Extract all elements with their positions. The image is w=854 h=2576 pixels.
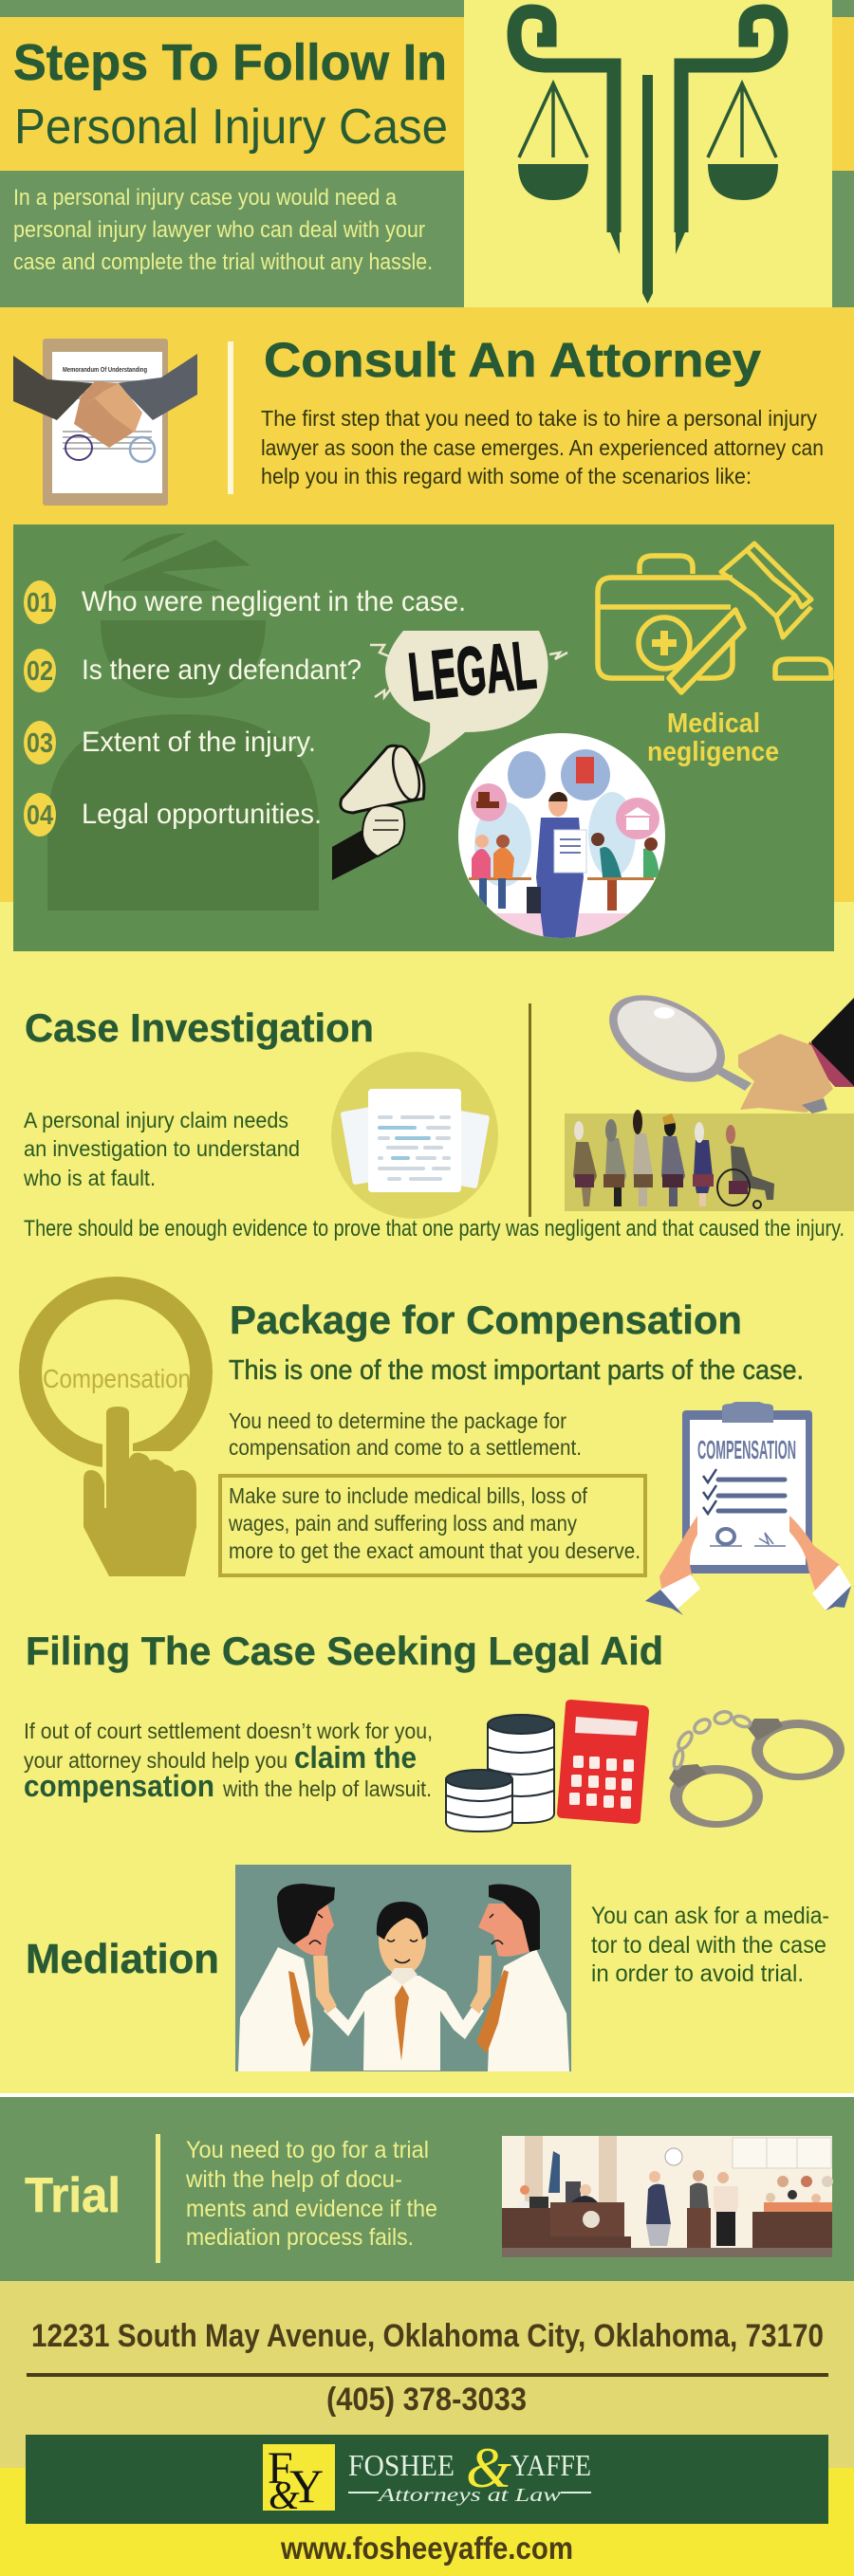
logo: foshee and yaffe — [26, 2435, 828, 2524]
logo: foshee and yaffe: YAFFE — [511, 2448, 591, 2482]
item 03: Extent of the injury. — [82, 727, 316, 758]
icon: calculator — [557, 1700, 649, 1824]
text: claim description: who is at fault. — [23, 1166, 156, 1190]
figure 6 wheelchair — [717, 1125, 774, 1208]
text: trial description: mediation process fails. — [186, 2224, 414, 2251]
panel: header — [0, 0, 854, 307]
item 02 — [24, 649, 362, 692]
logo: foshee and yaffe: FOSHEE — [348, 2448, 455, 2482]
icon: magnifying glass in hand — [595, 977, 854, 1113]
panel: mediation — [26, 1865, 829, 2071]
panel: filing the case — [24, 1628, 845, 1831]
list: scenario items — [24, 580, 466, 837]
text: filing description: with the help of lawsuit. — [222, 1776, 432, 1801]
logo: foshee and yaffe: F — [268, 2443, 293, 2493]
callout box — [220, 1476, 645, 1575]
text: phone: (405) 378-3033 — [326, 2382, 527, 2418]
right man — [476, 1884, 569, 2071]
heading: package for compensation: Package for Compensation — [230, 1297, 742, 1342]
item 01 — [24, 580, 466, 624]
text: filing description: claim the — [294, 1740, 417, 1775]
label: medical negligence: negligence — [647, 737, 779, 767]
title: Personal Injury Case — [14, 100, 448, 155]
panel: case investigation — [23, 977, 854, 1242]
text: filing description: your attorney should help you — [24, 1748, 288, 1773]
illustration: three businessmen — [235, 1865, 571, 2071]
icon: compensation button with pointing hand — [30, 1288, 201, 1579]
text: mediation description — [591, 1903, 829, 1987]
heading: case investigation: Case Investigation — [25, 1005, 374, 1050]
logo: foshee and yaffe: Attorneys at Law — [376, 2485, 562, 2506]
icon: scales of justice — [514, 11, 781, 304]
icon: handshake over document: Memorandum Of Understanding — [63, 367, 147, 374]
text: trial description: with the help of docu- — [185, 2166, 402, 2193]
logo: foshee and yaffe: & — [466, 2437, 511, 2499]
icon: medical kit and gavel — [598, 543, 831, 692]
callout box: Make sure to include medical bills, loss of — [229, 1483, 588, 1508]
figure 5 — [693, 1122, 714, 1206]
intro text: In a personal injury case you would need a — [13, 185, 398, 211]
text: claim description — [23, 1108, 300, 1190]
item 01: Who were negligent in the case. — [82, 586, 466, 617]
text: trial description — [185, 2137, 437, 2251]
item 03: 03 — [27, 728, 53, 759]
left man — [238, 1884, 335, 2071]
center man — [313, 1902, 492, 2070]
panel: contact footer — [0, 2281, 854, 2576]
item 02: 02 — [27, 656, 53, 687]
item 02: Is there any defendant? — [82, 654, 362, 686]
intro text: personal injury lawyer who can deal with your — [13, 217, 425, 243]
callout box: more to get the exact amount that you deserve. — [229, 1538, 640, 1563]
illustration: queue of people with briefcases — [565, 1110, 854, 1211]
item 04: Legal opportunities. — [82, 799, 322, 830]
logo: foshee and yaffe: & — [269, 2475, 300, 2518]
panel: package for compensation — [30, 1288, 851, 1615]
text: mediation description: You can ask for a media- — [591, 1903, 829, 1929]
icon: handcuffs — [669, 1710, 845, 1828]
heading: filing the case: Filing The Case Seeking Legal Aid — [26, 1628, 663, 1673]
text: package description: compensation and come to a settlement. — [229, 1435, 582, 1460]
logo: foshee and yaffe: Y — [289, 2459, 324, 2512]
panel: trial — [0, 2093, 854, 2281]
text: consult description — [261, 406, 824, 488]
icon: coin stacks — [446, 1715, 554, 1831]
icon: legal speech bubble: LEGAL — [405, 627, 540, 716]
heading: consult an attorney: Consult An Attorney — [264, 333, 762, 387]
label: medical negligence — [647, 708, 779, 767]
figure 4 — [661, 1113, 685, 1206]
heading: trial: Trial — [25, 2168, 121, 2223]
text: claim description: an investigation to understand — [24, 1136, 300, 1161]
icon: compensation button with pointing hand: Compensation — [43, 1364, 191, 1393]
text: package description: You need to determine the package for — [229, 1408, 566, 1433]
panel: consult an attorney — [0, 307, 854, 902]
figure 3 — [633, 1110, 653, 1206]
title: Steps To Follow In — [13, 34, 447, 91]
item 03 — [24, 721, 316, 764]
figure 1 — [573, 1121, 597, 1206]
figure 2 — [603, 1119, 626, 1206]
title — [13, 34, 448, 155]
item 04 — [24, 793, 322, 837]
text: mediation description: tor to deal with the case — [591, 1932, 826, 1959]
intro text — [13, 185, 433, 275]
label: medical negligence: Medical — [667, 708, 760, 739]
item 01: 01 — [27, 588, 53, 618]
callout box: wages, pain and suffering loss and many — [228, 1511, 577, 1536]
text: consult description: The first step that you need to take is to hire a personal injury — [261, 406, 817, 431]
text: trial description: ments and evidence if the — [186, 2196, 437, 2222]
text: package description — [229, 1408, 582, 1460]
icon: documents in circle — [331, 1052, 498, 1219]
intro text: case and complete the trial without any hassle. — [13, 249, 433, 275]
text: filing description: If out of court settlement doesn’t work for you, — [24, 1719, 433, 1743]
icon: megaphone with hand — [332, 744, 424, 880]
icon: compensation clipboard — [645, 1402, 851, 1615]
illustration: legal team circle — [458, 733, 666, 942]
panel: scenarios — [13, 524, 834, 951]
illustration: courtroom — [502, 2136, 833, 2257]
text: mediation description: in order to avoid trial. — [591, 1960, 804, 1987]
text: filing description: compensation — [24, 1769, 214, 1803]
text: consult description: help you in this regard with some of the scenarios like: — [261, 464, 752, 488]
text: trial description: You need to go for a trial — [186, 2137, 429, 2163]
subheading: This is one of the most important parts of the case. — [229, 1355, 804, 1386]
heading: mediation: Mediation — [26, 1936, 219, 1982]
text: filing description — [24, 1719, 433, 1803]
silhouette: lawyer — [47, 533, 319, 911]
text: claim description: A personal injury claim needs — [24, 1108, 288, 1132]
item 04: 04 — [27, 800, 53, 831]
icon: legal speech bubble — [370, 627, 567, 765]
icon: handshake over document — [13, 339, 197, 506]
text: website: www.fosheeyaffe.com — [280, 2530, 573, 2566]
